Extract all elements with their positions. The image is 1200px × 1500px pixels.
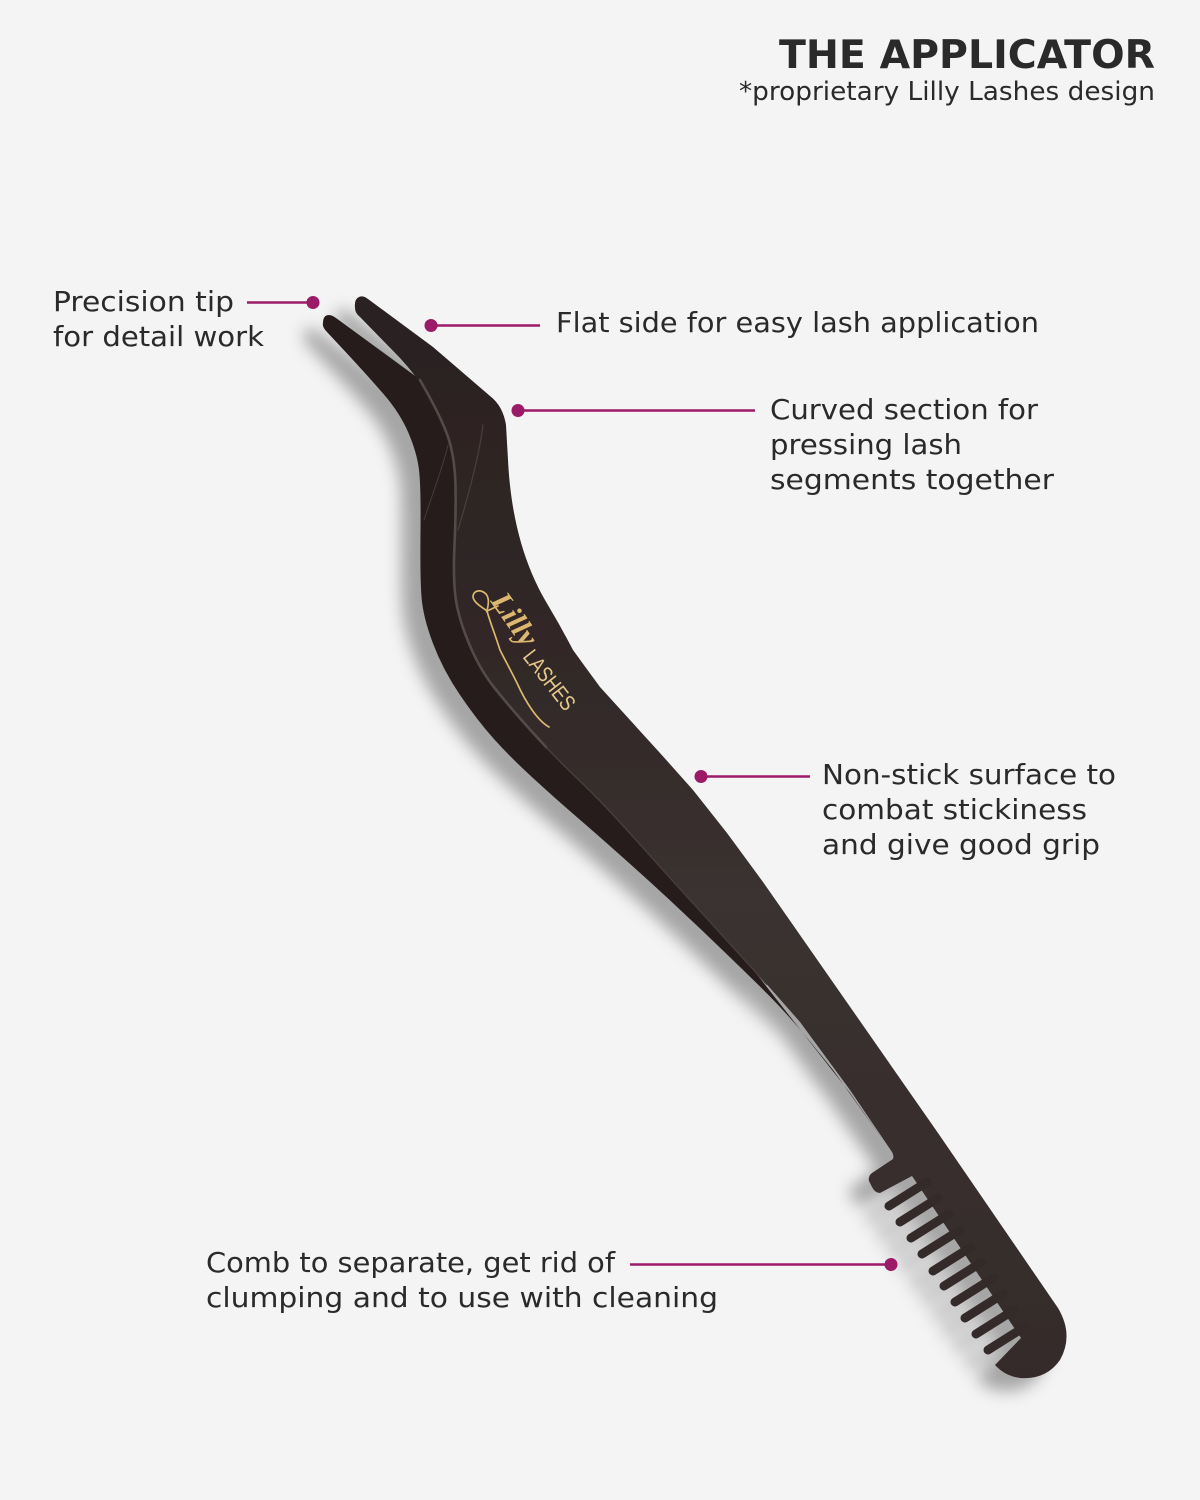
callout: non-stick surface xyxy=(694,759,1116,861)
tweezers body with shadow xyxy=(323,296,1067,1378)
logo script wordmark: Lilly xyxy=(484,585,545,653)
subtitle: *proprietary Lilly Lashes design xyxy=(739,77,1155,107)
back arm xyxy=(323,315,883,1140)
callout: comb xyxy=(206,1247,898,1314)
brand logo xyxy=(473,585,581,727)
callout: non-stick surface: Non-stick surface to xyxy=(822,759,1116,791)
logo script swash xyxy=(473,591,549,727)
callout: precision tip xyxy=(53,286,320,353)
callout: precision tip: Precision tip xyxy=(53,286,234,318)
title xyxy=(739,33,1155,107)
callout: precision tip: for detail work xyxy=(53,321,264,353)
edge highlights xyxy=(420,380,766,984)
callout: flat side: Flat side for easy lash application xyxy=(556,307,1039,339)
logo LASHES wordmark: LASHES xyxy=(518,645,581,715)
callout: curved section: segments together xyxy=(770,464,1055,496)
callout: comb: Comb to separate, get rid of xyxy=(206,1247,616,1279)
title: THE APPLICATOR xyxy=(779,33,1155,78)
comb teeth xyxy=(889,1182,1026,1350)
callout: comb: clumping and to use with cleaning xyxy=(206,1282,718,1314)
callout: non-stick surface: combat stickiness xyxy=(822,794,1087,826)
callout: curved section: Curved section for xyxy=(770,394,1039,426)
callout: curved section xyxy=(512,394,1055,496)
callout: curved section: pressing lash xyxy=(770,429,962,461)
applicator tweezers illustration xyxy=(323,296,1067,1378)
front arm and comb spine xyxy=(355,296,1067,1378)
callout: non-stick surface: and give good grip xyxy=(822,829,1100,861)
